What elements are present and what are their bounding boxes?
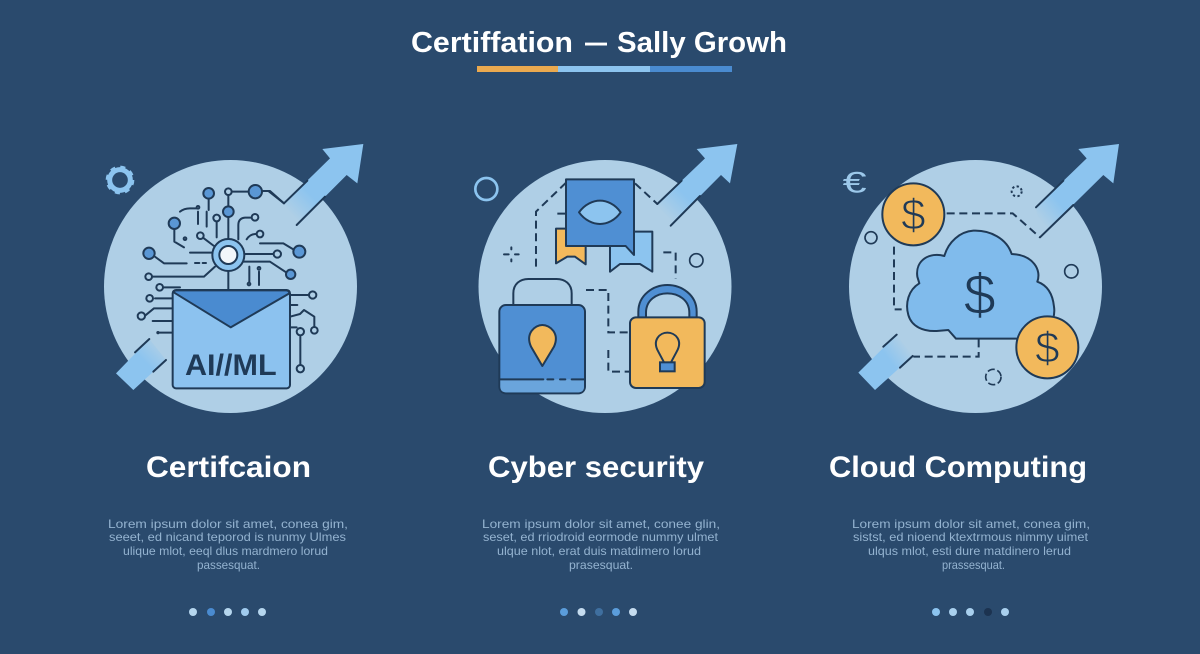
title: [411, 27, 787, 59]
title: —: [585, 27, 607, 59]
icon: growth arrow tail: [858, 335, 913, 390]
icon: growth arrow: [657, 144, 737, 226]
illustration: AI/ML envelope and circuit: [107, 144, 363, 390]
pagination dots: certification: [189, 608, 266, 616]
icon: envelope with AI//ML label: AI//ML: [185, 349, 277, 382]
text block: certification: ulique mlot, eeql dlus mardmero lorud: [123, 544, 328, 558]
text block: certification: [108, 517, 348, 572]
icon: growth arrow head: [1036, 144, 1119, 237]
icon: envelope with AI//ML label: [173, 290, 290, 388]
text block: cyber security: seset, ed rriodroid eormode nummy ulmet: [483, 530, 719, 544]
panel: cloud computing: [829, 144, 1119, 616]
title: Sally Growh: [617, 27, 787, 59]
text block: cloud computing: Lorem ipsum dolor sit amet, conea gim,: [852, 517, 1090, 531]
connector lines: [504, 183, 703, 372]
heading: cyber security: Cyber security: [488, 451, 704, 484]
icon: blue padlock: [499, 279, 585, 393]
icon: light blue speech bubble: [610, 232, 652, 272]
text block: cyber security: Lorem ipsum dolor sit amet, conee glin,: [482, 517, 720, 531]
connector lines: [865, 186, 1078, 385]
icon: top coin: $: [901, 190, 926, 239]
icon: euro sign: €: [843, 166, 867, 199]
text block: certification: seeet, ed nicand teporod is nunmy Ulmes: [109, 530, 346, 544]
panel: certification: [104, 144, 363, 616]
icon: gear: [107, 167, 133, 193]
pagination dots: cloud computing: [932, 608, 1009, 616]
illustration circle: cyber security: [478, 160, 732, 413]
text block: cloud computing: sistst, ed nioend ktextrmous nimmy uimet: [853, 530, 1089, 544]
heading: cloud computing: Cloud Computing: [829, 451, 1087, 484]
pagination dots: cyber security: [560, 608, 637, 616]
title: Certiffation: [411, 27, 573, 59]
circuit traces: [138, 185, 318, 372]
icon: circuit hub: [212, 239, 244, 271]
icon: ring: [475, 178, 497, 200]
icon: orange padlock: [630, 285, 705, 388]
icon: cloud with dollar: $: [964, 263, 996, 327]
panel: cyber security: [475, 144, 737, 616]
text block: certification: Lorem ipsum dolor sit amet, conea gim,: [108, 517, 348, 531]
text block: cloud computing: [852, 517, 1090, 572]
icon: growth arrow tail: [116, 339, 166, 390]
icon: document with eye: [566, 179, 634, 255]
illustration: cloud with coins: [843, 144, 1119, 390]
text block: cloud computing: prassesquat.: [942, 558, 1005, 572]
icon: bottom coin: [1016, 316, 1078, 378]
text block: cyber security: prasesquat.: [569, 558, 633, 572]
text block: cyber security: [482, 517, 720, 572]
text block: cyber security: ulque nlot, erat duis matdimero lorud: [497, 544, 701, 558]
text block: certification: passesquat.: [197, 558, 260, 572]
illustration circle: certification: [104, 160, 357, 413]
icon: bottom coin: $: [1035, 323, 1060, 372]
icon: growth arrow head: [268, 144, 363, 225]
illustration: locks and documents: [475, 144, 737, 393]
illustration circle: cloud computing: [849, 160, 1102, 413]
heading: certification: Certifcaion: [146, 451, 311, 484]
text block: cloud computing: ulqus mlot, esti dure matdinero lerud: [868, 544, 1071, 558]
icon: top coin: [882, 183, 944, 245]
icon: cloud with dollar: [907, 231, 1054, 339]
icon: orange speech bubble: [556, 229, 586, 264]
title underline: [477, 66, 732, 72]
